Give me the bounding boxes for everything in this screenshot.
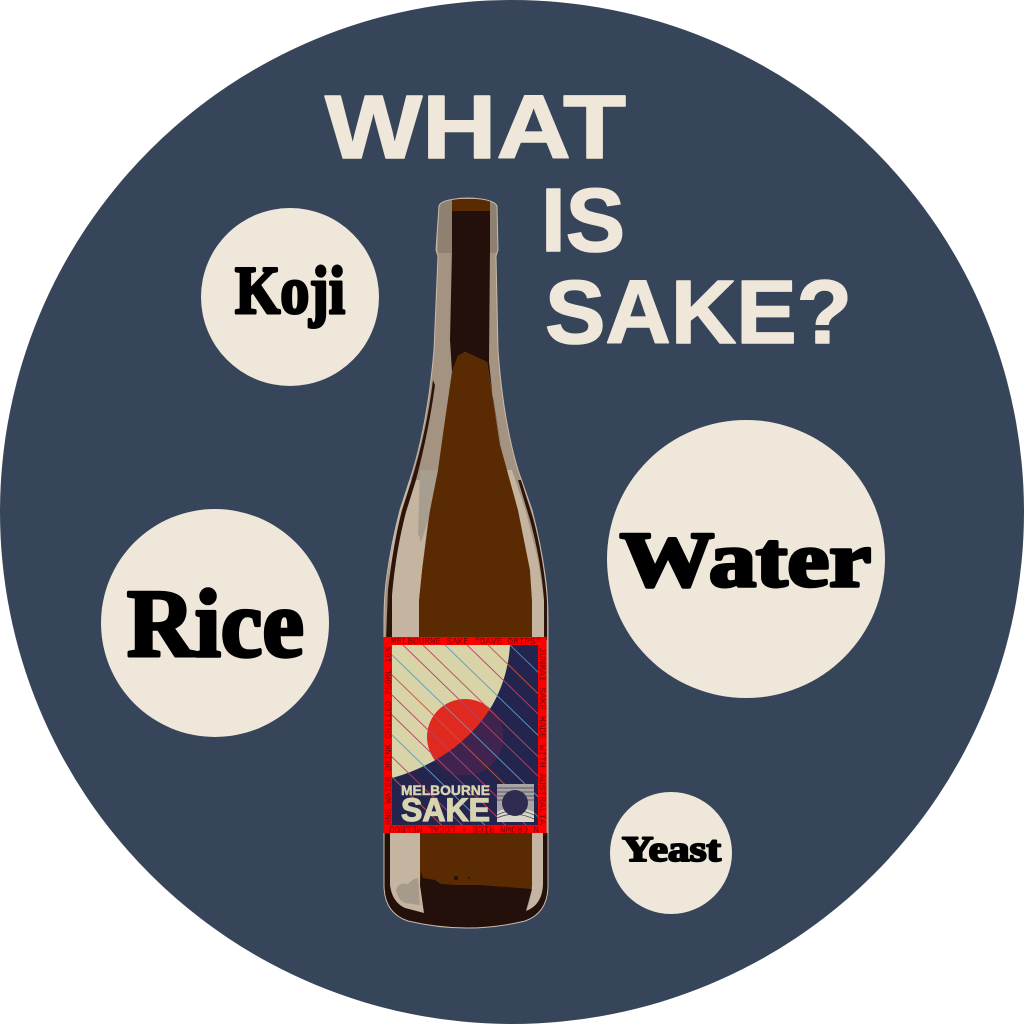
sun shadow [435, 708, 503, 775]
ingredient: Yeast [610, 792, 732, 914]
label border text: RNE WATER DRINK CHILLED 750ML 16% [384, 646, 394, 825]
ingredient: Rice: Rice [127, 570, 304, 677]
title word: SAKE?: SAKE? [545, 263, 852, 363]
lip brown glass [452, 199, 490, 211]
ingredient: Koji [201, 208, 379, 386]
diagonal lines [392, 645, 538, 825]
label brand: MELBOURNE SAKE: SAKE [401, 792, 490, 828]
dark neck [450, 211, 503, 457]
title word: WHAT: WHAT [325, 78, 626, 178]
bottle outline highlight [384, 198, 548, 928]
left cream highlight [388, 480, 428, 640]
red sun [427, 699, 503, 775]
label border text: N GROWN RICE + LOCAL MELBOU [389, 824, 539, 834]
ingredient: Water: Water [620, 516, 871, 603]
label border text [384, 637, 546, 834]
left dark edge [386, 380, 435, 640]
bottle label [384, 637, 546, 833]
bottle base [384, 833, 548, 935]
ingredient: Koji: Koji [235, 252, 345, 328]
label border text: MELBOURNE SAKE "DAVE DRIPS" [391, 637, 541, 647]
label artwork [392, 645, 538, 825]
lower left highlight [390, 833, 424, 913]
liquid [419, 352, 532, 890]
right dark edge [518, 480, 547, 640]
label red border [384, 637, 546, 833]
label border text: JUNMAI SAKE MADE WITH AUSTRALIA [536, 647, 546, 826]
right cream highlight [507, 470, 544, 640]
label emblem [497, 784, 534, 822]
title word: IS: IS [541, 171, 625, 271]
lip shading [438, 200, 452, 253]
title [325, 78, 852, 363]
bottle glass [380, 195, 552, 935]
label brand: MELBOURNE SAKE: MELBOURNE [401, 782, 490, 798]
ingredient: Rice [101, 509, 329, 737]
lower right highlight [526, 833, 543, 911]
sake bottle [384, 198, 548, 928]
ingredient: Yeast: Yeast [622, 829, 721, 869]
ingredient: Water [607, 420, 885, 698]
